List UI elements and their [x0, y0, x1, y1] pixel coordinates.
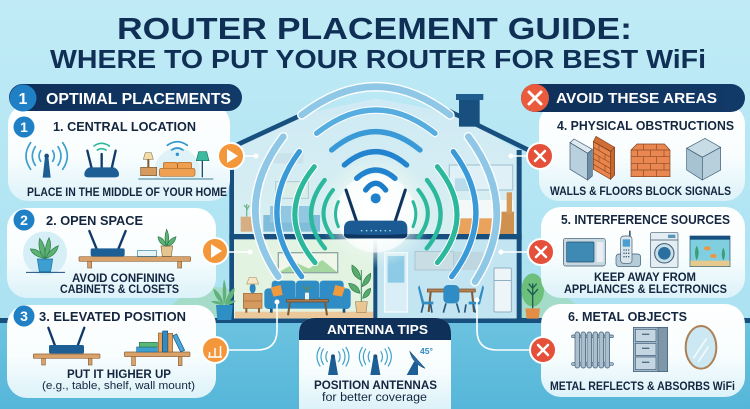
heading: physical obstructions: 4. PHYSICAL OBSTRUCTIONS	[557, 118, 734, 133]
tall plant	[349, 265, 371, 313]
blue sofa	[264, 281, 351, 313]
walls and floors	[229, 150, 522, 320]
caption: interference: KEEP AWAY FROM	[594, 272, 696, 284]
heading: metal objects: 6. METAL OBJECTS	[568, 309, 687, 324]
button: x 4	[527, 143, 553, 169]
upstairs left furniture	[241, 153, 320, 232]
icon: microwave	[563, 238, 605, 266]
downstairs painting	[278, 253, 338, 273]
panel: metal objects	[541, 304, 745, 397]
icon: cordless phone	[616, 231, 641, 267]
icon: router	[84, 143, 119, 177]
button: x 6	[530, 337, 556, 363]
roof	[237, 111, 528, 150]
caption: antenna tips: POSITION ANTENNAS	[314, 378, 437, 392]
heading: elevated position: 3. ELEVATED POSITION	[39, 309, 186, 324]
icon: drywall and bricks	[570, 136, 615, 180]
button: play 2	[202, 238, 228, 264]
central glow	[319, 155, 432, 268]
outdoor plant left	[211, 279, 236, 320]
header: optimal placements: OPTIMAL PLACEMENTS	[46, 91, 231, 108]
caption: interference: APPLIANCES & ELECTRONICS	[564, 284, 727, 296]
panel: elevated position	[7, 305, 216, 398]
lamp and nightstand	[243, 277, 262, 313]
caption: interference	[564, 272, 727, 296]
header: optimal placements: 1	[19, 91, 28, 108]
badge 2: 2	[20, 212, 28, 228]
icon: radiator	[572, 332, 613, 368]
icon: small plant	[158, 229, 176, 256]
label: 45 degrees: 45°	[420, 346, 433, 356]
icon: tilted antenna	[407, 352, 425, 375]
icon: potted plant	[23, 231, 67, 275]
dining set	[418, 285, 484, 313]
blue wifi arcs	[277, 110, 476, 277]
kitchen door and cabinets	[385, 252, 483, 312]
icons: antennas	[317, 347, 425, 375]
chimney	[456, 94, 483, 127]
green arcs	[295, 167, 457, 263]
panel: antenna tips	[299, 318, 451, 409]
icons: obstructions	[570, 136, 721, 180]
house interior	[233, 98, 518, 318]
caption: elevated position: (e.g., table, shelf, wall mount)	[42, 380, 195, 392]
caption: elevated position: PUT IT HIGHER UP	[67, 369, 171, 381]
icon: shelf with books	[124, 331, 190, 366]
caption: metal: METAL REFLECTS & ABSORBS WiFi	[550, 381, 735, 393]
icon: router on shelf	[89, 231, 126, 256]
caption: antenna tips: for better coverage	[322, 392, 427, 404]
title: WHERE TO PUT YOUR ROUTER FOR BEST WiFi	[50, 46, 706, 74]
header: antenna tips	[299, 318, 451, 340]
floor	[235, 312, 373, 318]
icon: radio tower	[26, 143, 67, 178]
icons: open space	[23, 229, 191, 275]
header: avoid these areas: AVOID THESE AREAS	[556, 90, 717, 107]
caption: antenna tips	[314, 378, 437, 404]
upstairs right bedroom	[449, 165, 514, 234]
fridge	[494, 268, 511, 312]
icon: brick wall	[631, 144, 670, 177]
icon: filing cabinet	[633, 327, 668, 372]
caption: obstructions: WALLS & FLOORS BLOCK SIGNALS	[550, 186, 731, 198]
panel: interference sources	[541, 207, 745, 298]
badge 3	[14, 306, 34, 326]
icon: living room	[138, 142, 213, 179]
icon: mirror	[686, 326, 716, 369]
central router	[344, 190, 407, 238]
icons: central location	[26, 142, 213, 179]
header: optimal placements	[9, 84, 242, 112]
icon: washing machine	[651, 233, 678, 267]
connector lines	[225, 154, 532, 350]
caption: central location: PLACE IN THE MIDDLE OF YOUR HOME	[27, 187, 227, 199]
icon: shelf	[79, 257, 191, 268]
caption: open space: AVOID CONFINING	[72, 273, 175, 285]
icon: antenna 1	[317, 347, 349, 375]
icons: interference	[563, 231, 730, 267]
icon: antenna 2	[359, 347, 391, 375]
panel: open space	[7, 208, 216, 298]
button: chart	[202, 337, 228, 363]
heading: central location: 1. CENTRAL LOCATION	[53, 119, 196, 134]
panel: central location	[8, 104, 230, 201]
icon: shelf with router	[33, 328, 100, 365]
outer light arcs	[255, 87, 497, 282]
button: x 5	[528, 239, 554, 265]
badge 1	[14, 116, 34, 138]
heading: interference sources: 5. INTERFERENCE SOURCES	[561, 212, 730, 227]
lower right room	[377, 239, 517, 318]
wifi dot	[371, 193, 381, 203]
title	[50, 11, 706, 74]
heading: open space: 2. OPEN SPACE	[46, 213, 143, 228]
coffee table	[287, 286, 328, 315]
house illustration	[229, 87, 528, 320]
panel: physical obstructions	[539, 104, 745, 201]
badge 2	[14, 210, 34, 230]
outdoor plant right	[521, 273, 544, 319]
caption: elevated position	[42, 369, 195, 392]
caption: open space	[60, 273, 179, 296]
header: avoid these areas	[521, 84, 745, 112]
caption: open space: CABINETS & CLOSETS	[60, 284, 179, 296]
icons: metal	[572, 326, 716, 372]
icons: elevated position	[33, 328, 190, 366]
lower left room	[234, 239, 373, 318]
icon: box	[137, 251, 157, 256]
icon: concrete cube	[687, 138, 721, 180]
badge 3: 3	[20, 308, 28, 324]
badge 1: 1	[20, 119, 28, 135]
button: play 1	[218, 143, 244, 169]
header: antenna tips: ANTENNA TIPS	[327, 322, 428, 337]
title: ROUTER PLACEMENT GUIDE:	[117, 11, 632, 46]
icon: aquarium	[690, 236, 730, 267]
